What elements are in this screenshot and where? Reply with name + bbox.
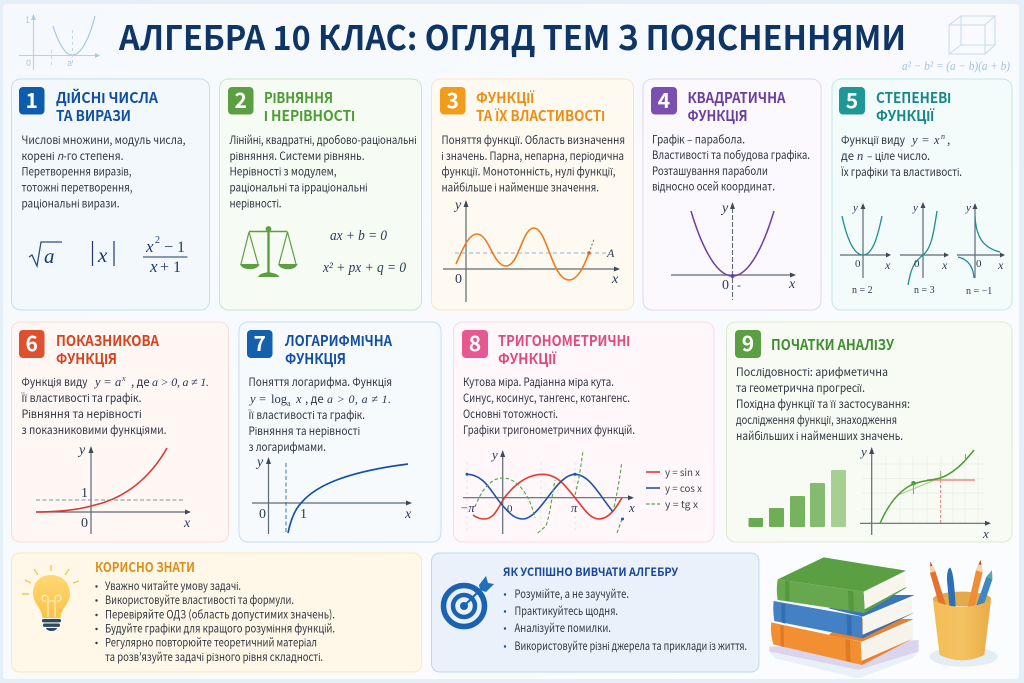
equations <box>322 228 407 276</box>
book: orange <box>771 618 915 665</box>
chart: n=2: y <box>852 202 858 214</box>
body text 8: Основні тотожності. <box>463 406 558 422</box>
chart: trig graphs: x <box>628 500 635 515</box>
panel 9: intro to analysis <box>726 322 1012 542</box>
list: study advice: Використовуйте різні джерела та приклади із життя. <box>514 638 747 654</box>
body text 6: Рівняння та нерівності <box>22 406 142 422</box>
formulas 1: − 1 <box>164 239 185 256</box>
body text 1: Перетворення виразів, <box>22 164 132 180</box>
badge 3: 3 <box>447 85 459 115</box>
badge 6 <box>19 328 44 358</box>
body text 6: , де <box>131 374 150 390</box>
heading 3: ТА ЇХ ВЛАСТИВОСТІ <box>476 105 605 126</box>
badge 2: 2 <box>235 85 247 115</box>
heading 8: ФУНКЦІЇ <box>498 348 557 369</box>
icon: target <box>444 576 494 626</box>
body text 5 <box>841 132 962 180</box>
icon: scales <box>240 227 298 277</box>
panel 5: power functions <box>832 79 1012 310</box>
body text 5: x <box>933 133 940 147</box>
heading 4: КВАДРАТИЧНА <box>688 87 786 108</box>
heading 3: ФУНКЦІЇ <box>476 87 535 108</box>
badge 1 <box>19 85 44 115</box>
decoration: parabola graph top left: a <box>67 56 72 69</box>
formulas 1: 2 <box>155 235 160 246</box>
badge 8: 8 <box>469 328 481 358</box>
body text 8: Кутова міра. Радіанна міра кута. <box>463 374 614 390</box>
body text 9: найбільших і найменших значень. <box>736 428 903 444</box>
body text 6: x <box>121 374 126 383</box>
list: useful tips: Регулярно повторюйте теоретичний матеріал <box>105 634 317 650</box>
chart: logarithm: x <box>404 507 412 522</box>
list: useful tips: Уважно читайте умову задачі. <box>105 578 241 594</box>
body text 1 <box>22 132 186 212</box>
chart: n=3: y <box>912 202 918 214</box>
body text 8: Графіки тригонометричних функцій. <box>463 422 635 438</box>
decoration: cube and formula top right <box>902 16 1010 73</box>
heading 6: ПОКАЗНИКОВА <box>56 330 160 351</box>
body text 4: Властивості та побудова графіка. <box>652 147 810 163</box>
body text 7: з логарифмами. <box>248 439 326 455</box>
body text 5: Їх графіки та властивості. <box>841 164 962 180</box>
chart: n=-1: x <box>997 258 1004 272</box>
heading 2: І НЕРІВНОСТІ <box>264 105 355 126</box>
body text 3: найбільше і найменше значення. <box>442 180 599 196</box>
panel: useful to know <box>12 553 422 672</box>
list: useful tips: Перевіряйте ОДЗ (область допустимих значень). <box>105 606 335 622</box>
body text 5: – ціле число. <box>867 148 930 164</box>
panel 7: logarithmic function <box>239 322 441 542</box>
body text 3: Поняття функції. Область визначення <box>442 132 625 148</box>
body text 7: a > 0, a ≠ 1. <box>327 392 391 406</box>
list: study advice: Розумійте, а не заучуйте. <box>514 586 629 602</box>
decoration: parabola graph top left <box>19 13 100 70</box>
body text 1: корені n-го степеня. <box>22 148 124 164</box>
heading 7: ЛОГАРИФМІЧНА <box>284 330 393 351</box>
chart: exponential: 0 <box>81 516 88 531</box>
chart: parabola <box>671 201 796 300</box>
chart: exponential <box>36 443 191 534</box>
chart: trig graphs: 0 <box>507 503 513 515</box>
chart: derivative: y <box>859 444 867 459</box>
decoration: parabola graph top left: 0 <box>26 56 31 69</box>
body text 2: нерівності. <box>230 196 282 212</box>
body text 7: x <box>295 392 302 406</box>
chart: n=3: n = 3 <box>914 285 935 296</box>
list: useful tips: та розв'язуйте задачі різного рівня складності. <box>105 649 323 665</box>
chart: parabola: 0 <box>722 278 729 293</box>
body text 4: Розташування параболи <box>652 163 768 179</box>
chart: derivative <box>859 444 991 541</box>
chart: function graph: y <box>453 198 462 213</box>
chart: exponential: y <box>77 443 86 458</box>
panel 1: real numbers <box>12 79 210 310</box>
heading 1 <box>56 87 159 126</box>
heading: how to study: ЯК УСПІШНО ВИВЧАТИ АЛГЕБРУ <box>503 564 679 580</box>
chart: trig graphs: π <box>571 501 578 515</box>
badge 9: 9 <box>742 328 754 358</box>
badge 7 <box>247 328 272 358</box>
heading 5 <box>876 87 951 126</box>
panel 2: equations <box>220 79 422 310</box>
chart: n=2 <box>840 202 891 296</box>
badge 4: 4 <box>658 85 670 115</box>
heading 7 <box>284 330 393 369</box>
formulas 1 <box>29 235 188 276</box>
body text 7: log <box>271 392 288 406</box>
badge 6: 6 <box>26 328 38 358</box>
list: study advice: Практикуйтесь щодня. <box>514 603 618 619</box>
body text 8: Синус, косинус, тангенс, котангенс. <box>463 390 630 406</box>
chart: trig graphs <box>460 447 635 534</box>
body text 1: Числові множини, модуль числа, <box>22 132 186 148</box>
chart: parabola: x <box>788 277 796 292</box>
equations: ax + b = 0 <box>330 228 388 244</box>
list: study advice: Аналізуйте помилки. <box>514 620 611 636</box>
heading 6 <box>56 330 160 369</box>
body text 5: , <box>947 132 950 148</box>
badge 8 <box>462 328 488 358</box>
icon: light bulb <box>22 565 79 631</box>
body text 4: відносно осей координат. <box>652 178 775 194</box>
chart: function graph: A <box>606 246 615 260</box>
heading 7: ФУНКЦІЯ <box>285 348 346 369</box>
body text 6: y <box>93 375 101 389</box>
heading 3 <box>476 87 605 126</box>
chart: logarithm: 1 <box>300 507 307 522</box>
chart: n=-1: n = −1 <box>966 286 992 297</box>
body text 2 <box>230 132 416 212</box>
panel 4: quadratic function <box>643 79 821 310</box>
book: blue <box>773 595 915 638</box>
badge 7: 7 <box>254 328 266 358</box>
panel: how to study <box>432 553 759 672</box>
body text 7: Рівняння та нерівності <box>248 423 360 439</box>
body text 7: , де <box>305 391 324 407</box>
body text 9: дослідження функції, знаходження <box>736 412 897 428</box>
formulas 1: x <box>97 243 108 267</box>
chart: parabola: - <box>737 278 741 292</box>
body text 6: a > 0, a ≠ 1. <box>152 375 209 389</box>
body text 9 <box>736 364 910 444</box>
body text 7: Її властивості та графік. <box>248 407 365 423</box>
body text 9: Послідовності: арифметична <box>736 364 888 380</box>
heading 8 <box>498 330 630 369</box>
chart: parabola: y <box>720 201 729 216</box>
badge 2 <box>228 85 254 115</box>
chart: bars <box>748 470 846 527</box>
chart: n=3: 0 <box>914 258 920 270</box>
badge 1: 1 <box>26 85 38 115</box>
body text 9: Похідна функції та її застосування: <box>736 396 910 412</box>
chart: logarithm <box>252 455 412 534</box>
badge 4 <box>651 85 677 115</box>
body text 6: = <box>104 375 111 389</box>
badge 5 <box>839 85 865 115</box>
body text 7: a <box>287 399 291 408</box>
chart: trig graphs: y <box>490 447 498 462</box>
chart: n=3 <box>900 202 949 296</box>
chart: n=2: n = 2 <box>852 285 873 296</box>
heading 2: РІВНЯННЯ <box>264 87 333 108</box>
chart: derivative: x <box>982 526 989 541</box>
heading 5: ФУНКЦІЇ <box>876 105 935 126</box>
body text 3 <box>442 132 625 196</box>
body text 4: Графік – парабола. <box>652 132 745 148</box>
chart: n=3: x <box>941 258 948 272</box>
chart: function graph <box>443 198 620 302</box>
body text 5: Функції виду <box>841 132 905 148</box>
badge 3 <box>440 85 466 115</box>
body text 5: де <box>841 148 854 164</box>
badge 5: 5 <box>846 85 858 115</box>
body text 5: = <box>922 133 929 147</box>
heading 8: ТРИГОНОМЕТРИЧНІ <box>498 330 630 351</box>
body text 6: Її властивості та графік. <box>22 390 142 406</box>
heading 4: ФУНКЦІЯ <box>688 105 748 126</box>
body text 2: Нерівності з модулем, <box>230 164 336 180</box>
book: green <box>777 557 907 613</box>
body text 2: раціональні та ірраціональні <box>230 180 368 196</box>
legend <box>646 464 702 511</box>
chart: exponential: x <box>183 516 191 531</box>
heading 5: СТЕПЕНЕВІ <box>876 87 951 108</box>
heading 9: ПОЧАТКИ АНАЛІЗУ <box>771 334 894 355</box>
chart: n=-1 <box>957 202 1005 297</box>
heading 1: ТА ВИРАЗИ <box>56 105 131 126</box>
body text 5: n <box>857 149 863 163</box>
body text 6: Функція виду <box>22 374 88 390</box>
chart: n=2: 0 <box>855 258 861 270</box>
body text 6: a <box>115 375 121 389</box>
chart: n=2: x <box>884 258 891 272</box>
title: АЛГЕБРА 10 КЛАС: ОГЛЯД ТЕМ З ПОЯСНЕННЯМИ <box>118 11 906 60</box>
body text 5: y <box>910 133 918 147</box>
body text 7: Поняття логарифма. Функція <box>248 374 392 390</box>
heading 2 <box>264 87 355 126</box>
heading 6: ФУНКЦІЯ <box>56 348 117 369</box>
chart: logarithm: y <box>255 455 264 470</box>
legend: y = sin x <box>665 464 700 479</box>
list: study advice <box>504 586 747 654</box>
chart: n=-1: y <box>965 202 971 214</box>
panel 3: functions <box>432 79 634 310</box>
body text 3: і значень. Парна, непарна, періодична <box>442 148 624 164</box>
body text 7 <box>248 374 392 455</box>
formulas 1: x <box>149 257 158 276</box>
illustration: stack of books <box>769 557 919 678</box>
chart: exponential: 1 <box>81 486 88 501</box>
badge 9 <box>735 328 761 358</box>
equations: x² + px + q = 0 <box>322 260 407 276</box>
chart: function graph: 0 <box>455 272 462 287</box>
chart: n=-1: 0 <box>976 258 982 270</box>
chart: function graph: x <box>611 272 619 287</box>
body text 1: раціональні вирази. <box>22 196 120 212</box>
body text 7: y <box>248 392 256 406</box>
body text 3: функції. Монотонність, нулі функції, <box>442 164 616 180</box>
decoration: cube and formula top right: a² − b² = (a − b)(a + b) <box>902 59 1010 73</box>
body text 9: та геометрична прогресії. <box>736 380 865 396</box>
legend: y = tg x <box>665 496 698 511</box>
body text 2: Лінійні, квадратні, дробово-раціональні <box>230 132 416 148</box>
body text 8 <box>463 374 635 438</box>
heading: useful to know: КОРИСНО ЗНАТИ <box>95 556 195 576</box>
body text 6: з показниковими функціями. <box>22 422 166 438</box>
panel 8: trigonometric functions <box>454 322 714 542</box>
chart: trig graphs: −π <box>460 501 475 515</box>
body text 4 <box>652 132 810 194</box>
formulas 1: x <box>145 237 154 256</box>
legend: y = cos x <box>665 480 702 495</box>
body text 5: n <box>941 132 945 141</box>
chart: logarithm: 0 <box>259 507 266 522</box>
formulas 1: + 1 <box>160 259 181 276</box>
illustration: pencil cup <box>930 560 998 667</box>
body text 1: тотожні перетворення, <box>22 180 132 196</box>
body text 6 <box>22 374 209 438</box>
body text 2: рівняння. Системи рівнянь. <box>230 148 364 164</box>
heading 4 <box>688 87 786 126</box>
panel 6: exponential function <box>12 322 228 542</box>
list: useful tips <box>95 578 335 665</box>
body text 7: = <box>259 392 266 406</box>
decoration: parabola graph top left: 1 <box>25 13 30 26</box>
formulas 1: a <box>44 244 54 268</box>
list: useful tips: Будуйте графіки для кращого розуміння функцій. <box>105 620 335 636</box>
heading 1: ДІЙСНІ ЧИСЛА <box>56 87 159 108</box>
list: useful tips: Використовуйте властивості та формули. <box>105 592 294 608</box>
